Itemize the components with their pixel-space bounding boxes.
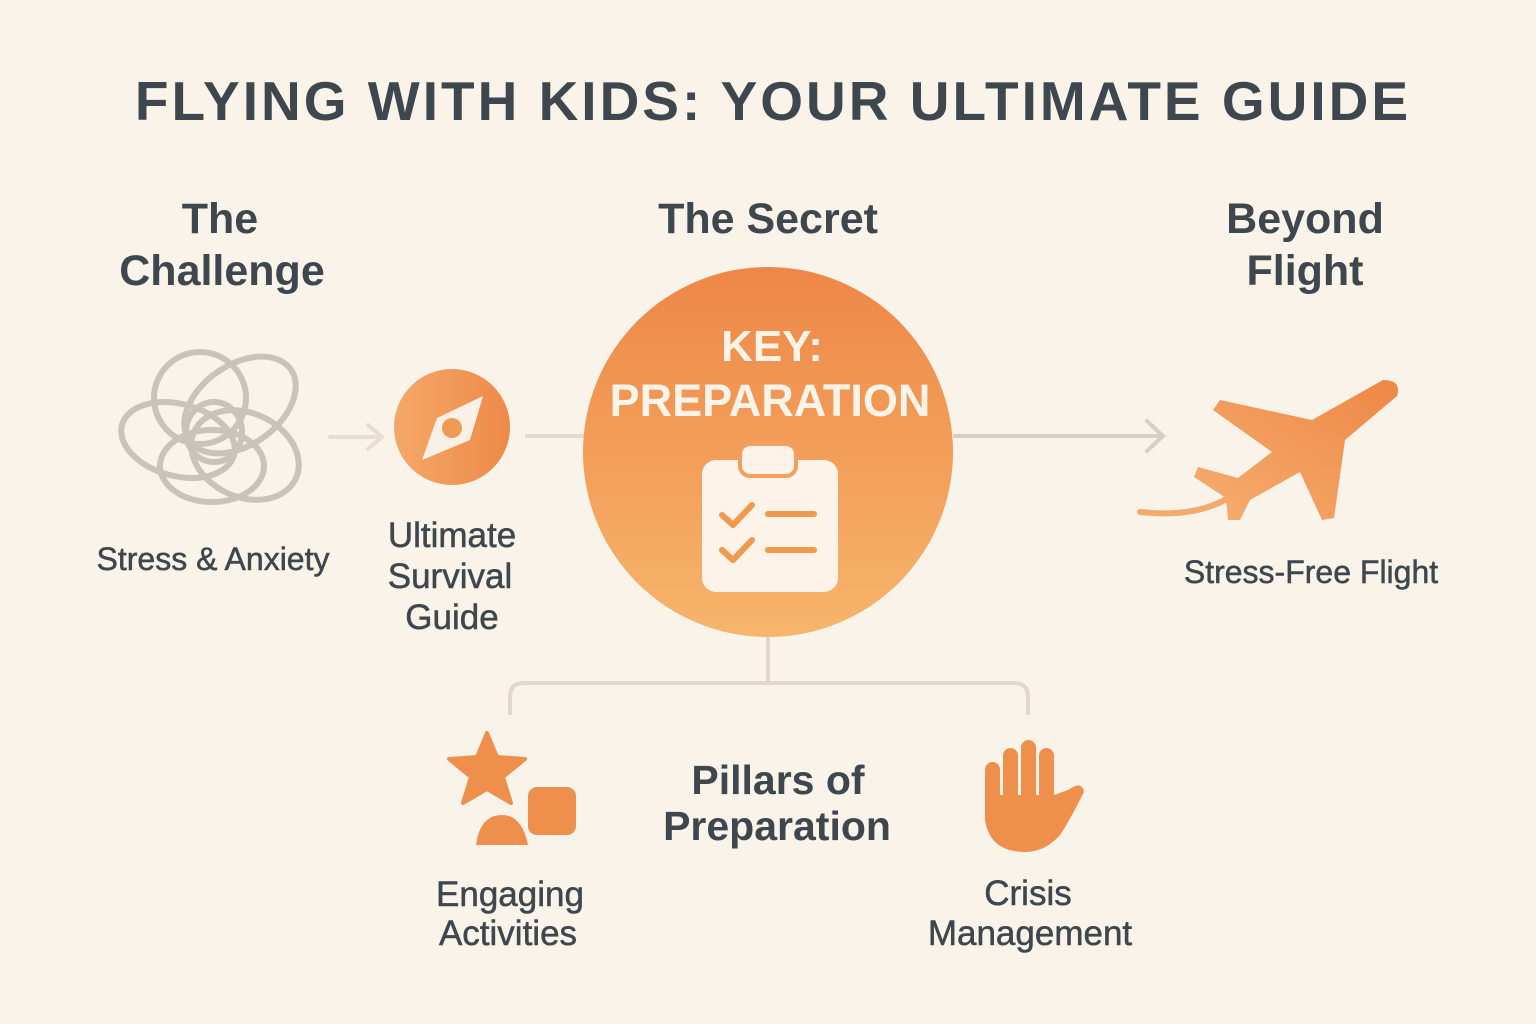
label: Stress & Anxiety: Stress & Anxiety	[97, 541, 329, 577]
label: Crisis Management: Management	[928, 914, 1132, 953]
heading: The Secret: The Secret	[658, 195, 878, 243]
label: Engaging Activities: Activities	[439, 914, 577, 953]
icon: airplane	[1140, 380, 1398, 520]
label: Ultimate Survival Guide: Ultimate	[388, 516, 516, 555]
icon: tangled stress loops	[113, 337, 314, 517]
arrow: challenge to guide	[330, 425, 382, 449]
icon: clipboard checklist	[702, 444, 838, 592]
label: Ultimate Survival Guide: Guide	[405, 598, 499, 637]
central circle: key preparation: KEY:	[721, 322, 823, 371]
icon: star and shapes	[449, 733, 576, 845]
title: FLYING WITH KIDS: YOUR ULTIMATE GUIDE	[135, 70, 1411, 132]
heading: Pillars of Preparation: Pillars of	[691, 757, 865, 803]
icon: compass	[394, 369, 510, 485]
heading: Beyond Flight: Beyond	[1226, 195, 1384, 243]
icon: hand	[985, 740, 1084, 852]
label: Crisis Management: Crisis	[984, 874, 1072, 913]
heading: The Challenge: The	[182, 195, 258, 243]
heading: Pillars of Preparation: Preparation	[663, 803, 891, 849]
label: Ultimate Survival Guide: Survival	[388, 557, 512, 596]
heading: The Challenge: Challenge	[119, 247, 325, 295]
central circle: key preparation	[583, 267, 953, 637]
tree connector	[510, 637, 1028, 715]
label: Stress-Free Flight: Stress-Free Flight	[1184, 554, 1438, 590]
arrow: to flight	[955, 421, 1163, 451]
label: Engaging Activities: Engaging	[436, 875, 584, 914]
connector line	[525, 434, 585, 438]
central circle: key preparation: PREPARATION	[610, 375, 930, 426]
heading: Beyond Flight: Flight	[1246, 247, 1364, 295]
